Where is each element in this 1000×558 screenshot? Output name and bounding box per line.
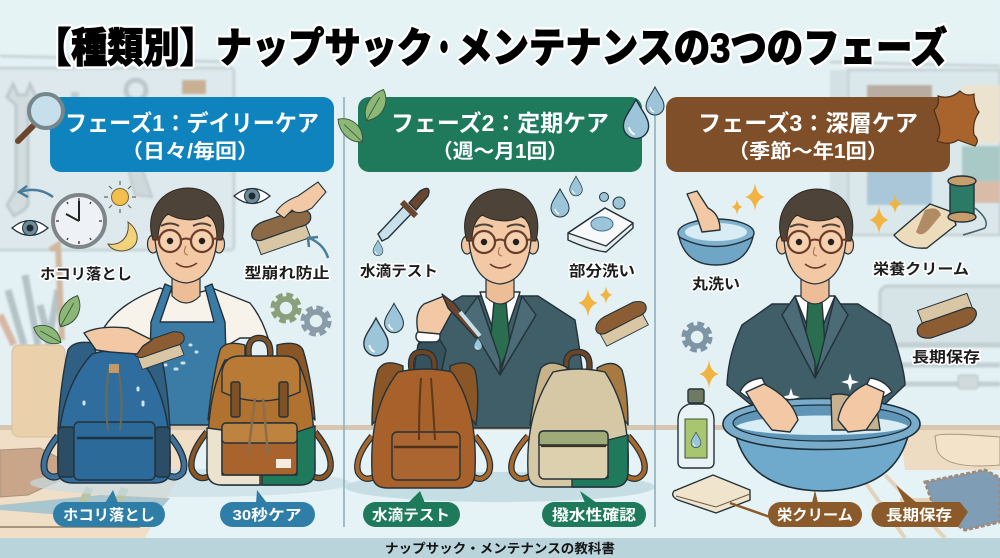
figure: man in apron [100,188,268,425]
bottom footer band [0,538,1000,558]
label: dust removal: ホコリ落とし [40,266,132,283]
icon: sparkles [578,286,612,317]
phase 2 header [358,97,642,172]
chip: nourishing cream: 栄クリーム [777,507,853,524]
icon: crescent moon [108,222,137,251]
icon: sun [104,181,136,213]
icon: folded towel [673,475,750,513]
backpack: blue [44,342,184,483]
icon: eye [12,220,48,236]
divider between phase 2 and 3 [654,97,656,527]
footer caption: ナップサック・メンテナンスの教科書 [385,541,615,556]
chip: nourishing cream [768,490,862,527]
icon: water drops on header [623,87,664,139]
phase 1 header: （日々/毎回） [121,140,259,163]
icon: leather hide [934,91,979,146]
hand left [746,384,798,432]
dust particles [165,345,197,369]
cloth in water [831,394,880,430]
phase 3 header: フェーズ3：深層ケア [698,110,918,136]
phase 2 header: （週～月1回） [432,140,568,163]
chip: dust removal [53,490,165,527]
icon: leaves [33,295,87,350]
icon: hand with brush [252,182,326,255]
label: long-term storage: 長期保存 [912,348,980,366]
label: nourishing cream: 栄養クリーム [873,260,969,278]
phase 1 header [50,97,334,172]
icon: gear [686,326,708,348]
icon: thread spool [948,176,986,235]
label: full wash: 丸洗い [692,275,740,293]
divider between phase 1 and 2 [343,97,345,527]
title: ・ [432,25,456,71]
icon: sparkles [732,183,765,215]
icon: sparkle [699,360,719,388]
phase 2 header: フェーズ2：定期ケア [391,110,609,136]
label: partial wash: 部分洗い [569,262,635,280]
backpack: brown flap [191,338,331,485]
figure: man in suit with dropper [405,189,588,428]
chip: long-term storage: 長期保存 [886,506,952,524]
chip: 30 second care: 30秒ケア [232,506,302,524]
title: メンテナンスの3つのフェーズ [456,25,947,71]
icon: leaves on header [338,89,393,146]
chip: water drop test [363,491,460,527]
icon: eye right [234,188,270,204]
icon: clock [53,195,105,247]
chip: water repellency check [542,491,646,527]
chip: long-term storage [872,485,968,527]
icon: storage brush [917,293,976,338]
backpack: brown drawstring [357,352,490,488]
title: メンテナンスの3つのフェーズ [456,25,947,71]
icon: large water drops [364,303,403,356]
icon: curved arrow up [308,237,328,258]
phase 3 header: （季節～年1回） [728,140,888,163]
icon: dropper [373,188,429,256]
icon: hand over bowl [678,191,754,265]
title: ・ [432,25,456,71]
icon: gears [274,296,328,332]
panel: phase 2 periodic care [338,87,664,527]
label: water drop test: 水滴テスト [360,263,438,280]
icon: curved arrow left [19,186,53,197]
figure: man in suit [727,189,905,406]
backpack: beige and green [511,352,645,487]
label: shape retention: 型崩れ防止 [244,264,330,282]
icon: basin with water [723,384,920,491]
panel: phase 1 daily care [12,94,334,527]
title: 【種類別】ナップサック [35,25,433,71]
hand right [838,384,884,432]
hand holding brush [84,327,152,354]
chip: water repellency check: 撥水性確認 [552,506,636,524]
icon: stained cloth [894,204,956,248]
icon: brush [593,300,651,347]
title: 【種類別】ナップサック [35,25,433,71]
icon: sparkles right [869,194,902,234]
phase 3 header [666,97,950,172]
icon: water drops [551,176,625,217]
title [35,25,947,71]
chip: water drop test: 水滴テスト [372,507,450,524]
icon: cloth with water spot [568,208,633,252]
icon: bottle [678,389,714,468]
chip: 30 second care [220,490,315,527]
icon: magnifying glass [18,94,63,141]
connector: towel to cream chip [730,503,770,517]
icon: brush on backpack [134,332,184,369]
chip: dust removal: ホコリ落とし [63,507,155,524]
panel: phase 3 deep care [666,91,986,527]
phase 1 header: フェーズ1：デイリーケア [65,110,319,136]
